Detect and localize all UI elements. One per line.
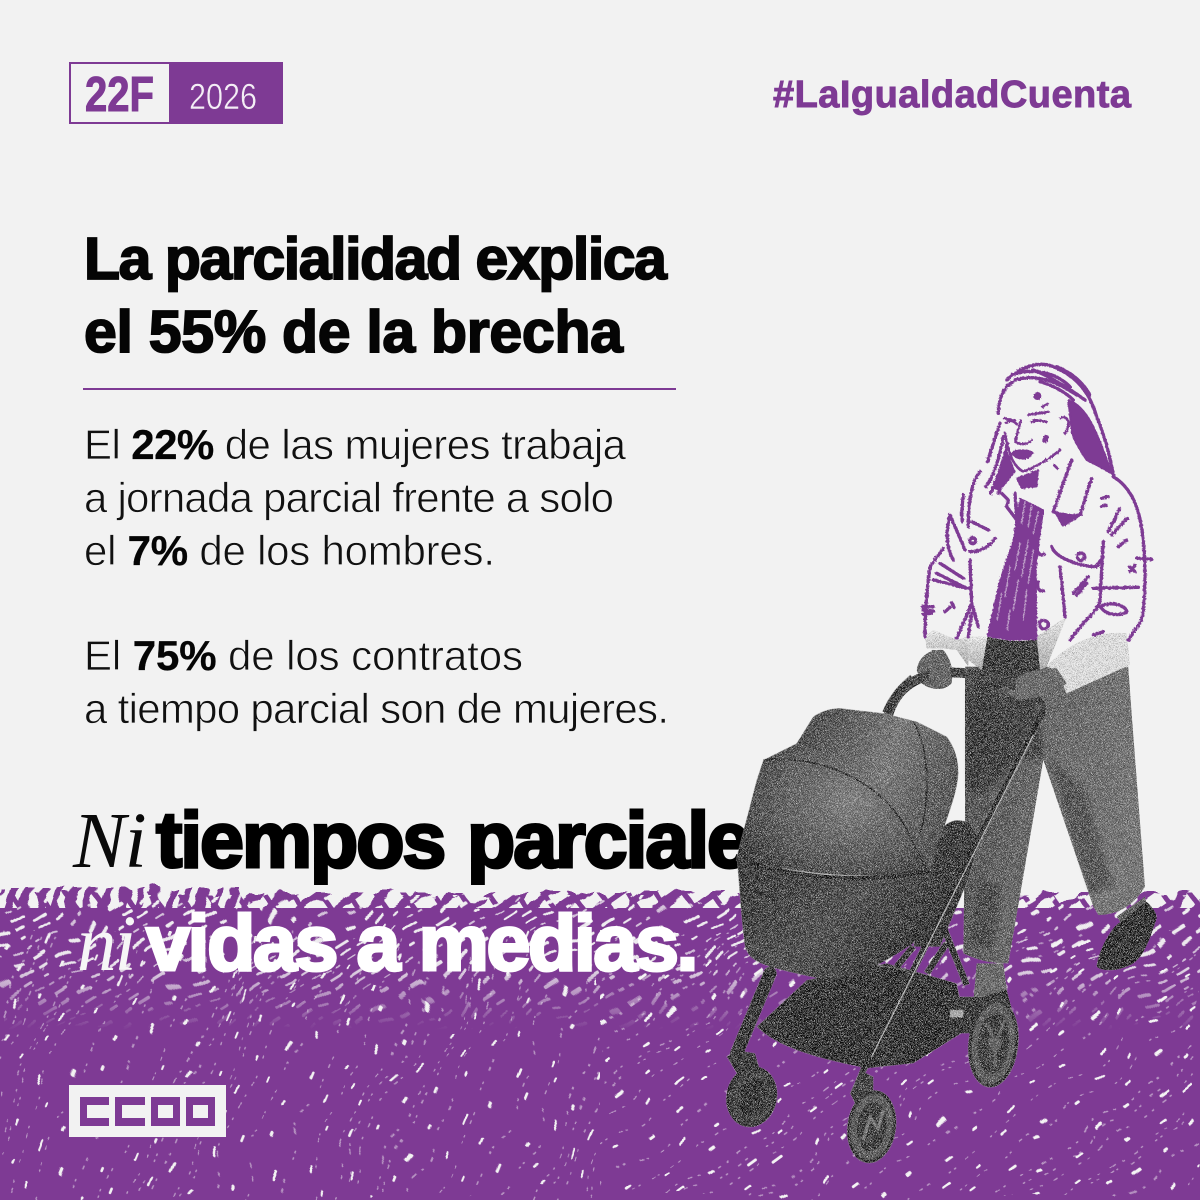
date badge 22F 2026 <box>70 62 283 124</box>
canopy seams <box>763 722 927 870</box>
jacket left <box>962 472 980 527</box>
hashtag: #LaIgualdadCuenta <box>773 74 1132 116</box>
CCOO logo <box>69 1085 226 1137</box>
basket <box>757 963 967 1068</box>
body text: part-time share <box>84 421 627 574</box>
collars <box>1053 460 1092 517</box>
heading <box>84 226 668 365</box>
rear frame <box>897 927 967 985</box>
body text: part-time share: El 22% de las mujeres trabaja <box>84 421 627 468</box>
slogan line 1: Ni <box>72 798 146 885</box>
bassinet <box>737 857 933 980</box>
purple line drawing of upper body <box>923 364 1152 640</box>
figure: woman pushing pram <box>722 364 1157 1164</box>
pram handle <box>887 650 1013 720</box>
hair <box>986 364 1113 493</box>
scribbled purple ground <box>0 888 1200 1200</box>
slogan line 2: ni <box>77 901 134 988</box>
canopy <box>737 708 958 875</box>
neck and shirt scribble <box>1017 470 1038 488</box>
body text: contracts <box>84 632 669 732</box>
jacket and shirt photo part <box>917 617 1130 700</box>
slogan line 2: vidas a medias. <box>146 898 696 987</box>
jacket right <box>1113 477 1145 640</box>
wheel rear <box>947 997 1021 1088</box>
body text: part-time share: a jornada parcial frente a solo <box>84 474 614 521</box>
body text: part-time share: el 7% de los hombres. <box>84 527 495 574</box>
seat arm <box>913 820 980 947</box>
date badge 22F 2026: 2026 <box>189 76 257 117</box>
pram <box>722 678 1043 1164</box>
body text: contracts: El 75% de los contratos <box>84 632 523 679</box>
heading: La parcialidad explica <box>84 226 668 292</box>
trousers and shoes <box>963 667 1157 1027</box>
heading: el 55% de la brecha <box>84 299 624 365</box>
front leg <box>737 973 770 1053</box>
slogan line 1: tiempos parciales <box>156 795 791 884</box>
face <box>1004 392 1069 472</box>
heading rule <box>83 388 676 390</box>
date badge 22F 2026: 22F <box>85 68 154 122</box>
long pole <box>863 710 1043 1070</box>
wheel front left <box>722 1050 781 1130</box>
body text: contracts: a tiempo parcial son de mujeres. <box>84 685 669 732</box>
wheel front right <box>844 1070 899 1164</box>
